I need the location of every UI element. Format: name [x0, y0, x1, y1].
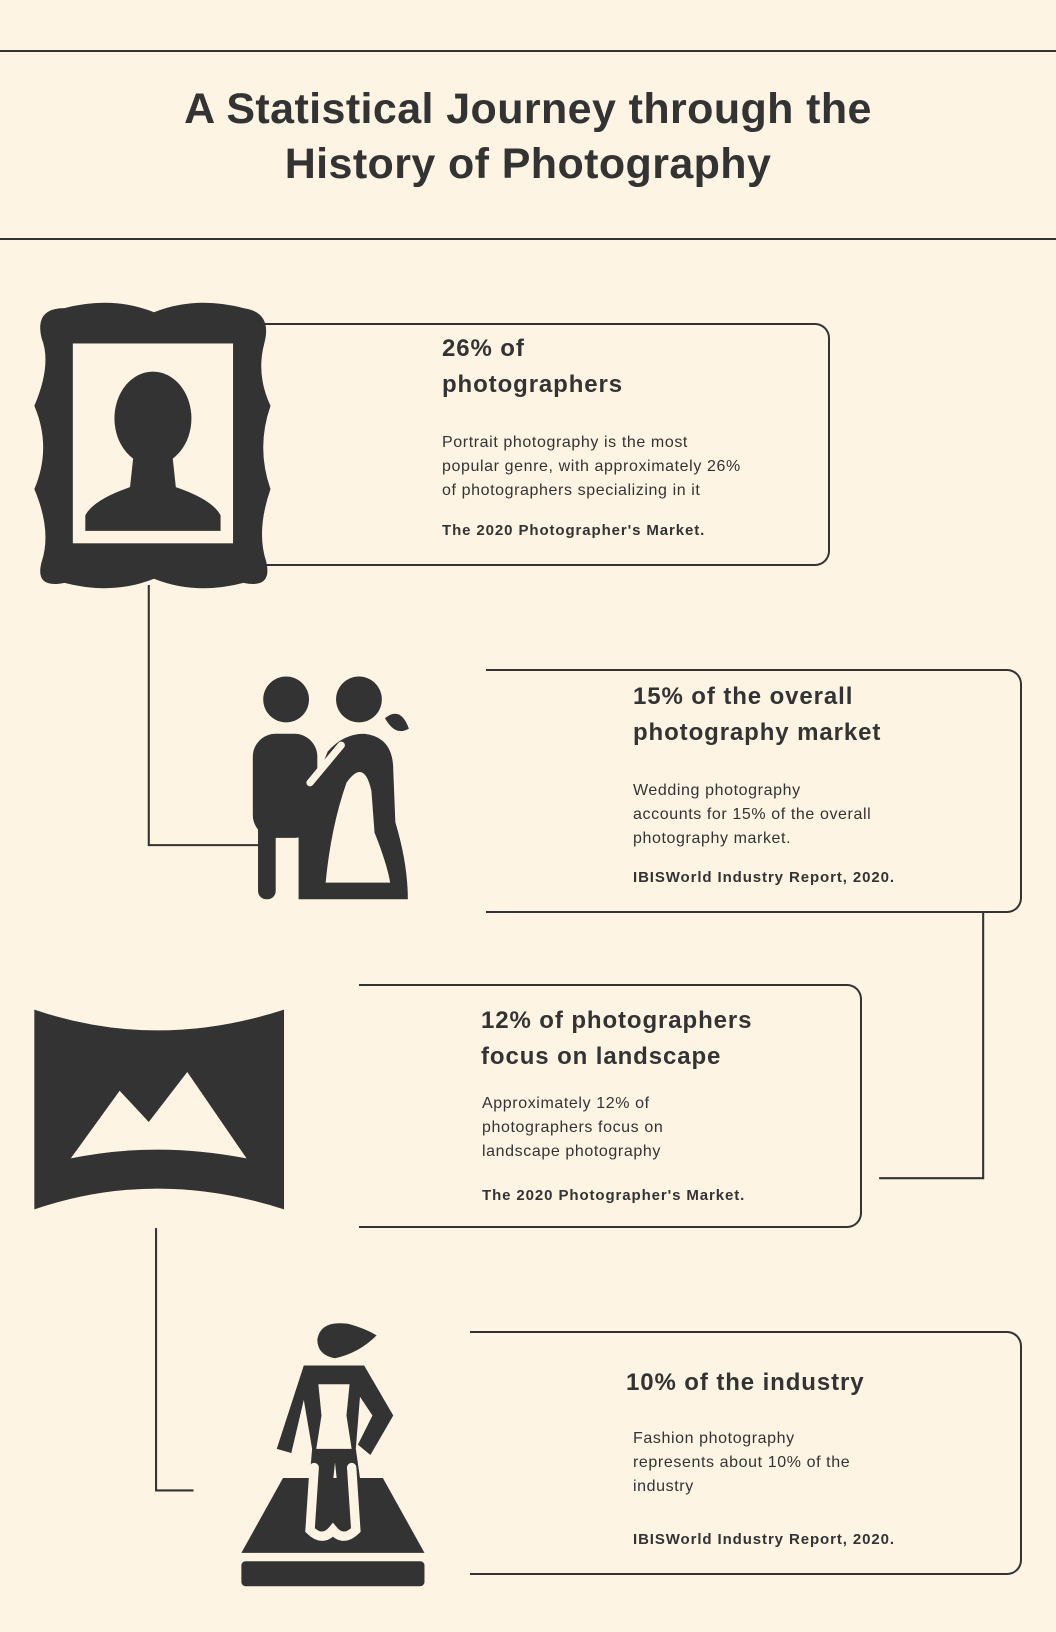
card 4 body: Fashion photography	[633, 1430, 795, 1447]
icon: landscape panorama	[34, 1010, 284, 1209]
icon: wedding couple	[253, 677, 409, 899]
card 4 heading: 10% of the industry	[626, 1369, 864, 1396]
card 1 heading: 26% of	[442, 335, 525, 362]
card 3 heading	[481, 1007, 752, 1070]
card 3: landscape	[359, 984, 862, 1228]
card 2 body: accounts for 15% of the overall	[633, 806, 871, 823]
card 3 source: The 2020 Photographer's Market.	[482, 1187, 745, 1204]
card 4 body: industry	[633, 1478, 694, 1495]
card 2 body: photography market.	[633, 830, 791, 847]
title	[184, 85, 872, 188]
connector 1	[149, 585, 260, 845]
card 2 source: IBISWorld Industry Report, 2020.	[633, 869, 895, 886]
card 1 heading: photographers	[442, 371, 623, 398]
card 3 body: Approximately 12% of	[482, 1095, 650, 1112]
card 2 body	[633, 782, 871, 847]
connector 2	[879, 913, 983, 1178]
card 4 body	[633, 1430, 850, 1495]
card 2 body: Wedding photography	[633, 782, 801, 799]
card 1 body: Portrait photography is the most	[442, 434, 688, 451]
card 2 heading	[633, 683, 881, 746]
card 4: fashion	[470, 1331, 1022, 1575]
card 2: wedding	[486, 669, 1022, 913]
title: A Statistical Journey through the	[184, 85, 872, 133]
card 1 source: The 2020 Photographer's Market.	[442, 522, 705, 539]
card 1: portrait	[250, 323, 830, 566]
icon: portrait frame	[34, 303, 271, 588]
connector 3	[156, 1228, 194, 1490]
card 3 body: landscape photography	[482, 1143, 661, 1160]
card 4 body: represents about 10% of the	[633, 1454, 850, 1471]
card 2 heading: photography market	[633, 719, 881, 746]
card 2 heading: 15% of the overall	[633, 683, 853, 710]
icon: fashion model	[241, 1323, 424, 1586]
card 1 body: popular genre, with approximately 26%	[442, 458, 741, 475]
card 3 heading: focus on landscape	[481, 1043, 721, 1070]
card 1 body: of photographers specializing in it	[442, 482, 700, 499]
card 4 source: IBISWorld Industry Report, 2020.	[633, 1531, 895, 1548]
card 1 body	[442, 434, 741, 499]
card 3 heading: 12% of photographers	[481, 1007, 752, 1034]
card 1 heading	[442, 335, 623, 398]
card 3 body	[482, 1095, 663, 1160]
card 3 body: photographers focus on	[482, 1119, 663, 1136]
title: History of Photography	[285, 140, 771, 188]
